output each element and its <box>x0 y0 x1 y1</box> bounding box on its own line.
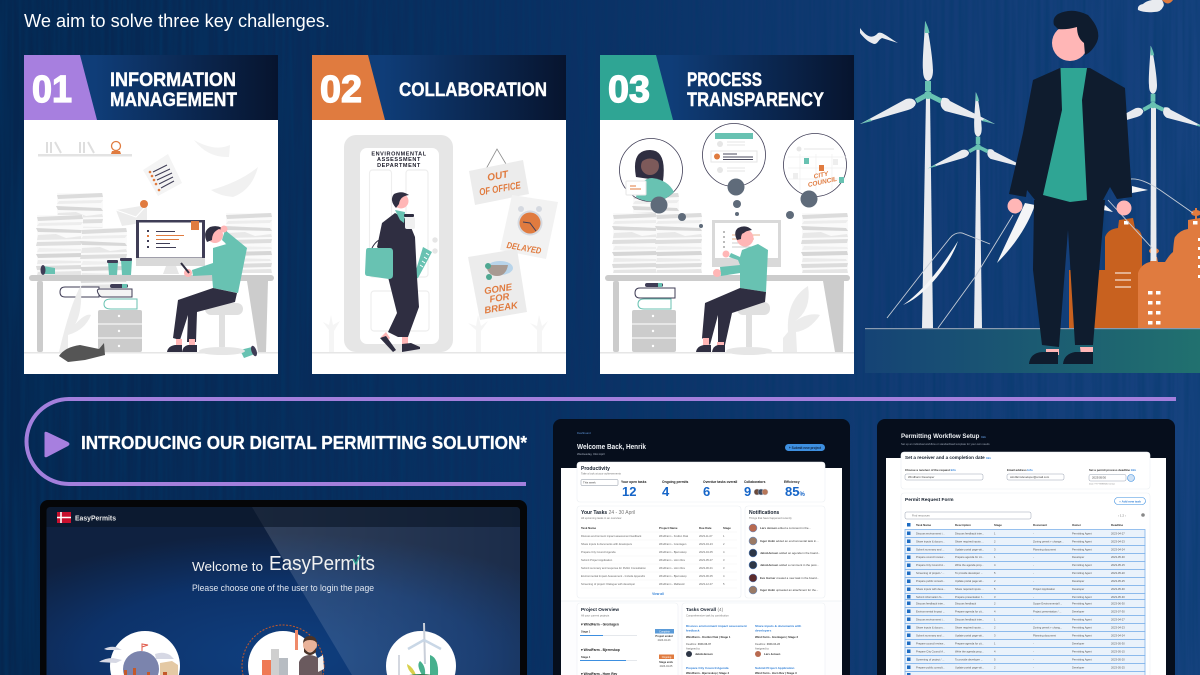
card: permit request form: Find resources <box>912 514 930 518</box>
sign: out of office: OUT <box>487 169 510 184</box>
card: notifications: Lars Jensen edited a comment in the... <box>760 526 811 530</box>
card: notifications: JakobJensen added an agenda in the board... <box>760 551 820 555</box>
dashboard greeting: Dashboard <box>577 431 591 435</box>
task rows: 2 <box>994 579 996 583</box>
thought bubble: calendar <box>784 134 846 196</box>
task rows: 1 <box>994 555 996 559</box>
card: tasks overall: Submit Project Application <box>755 666 795 670</box>
task rows: Permitting Agent <box>1072 571 1092 575</box>
task rows: Screening of project / ... <box>916 571 945 575</box>
card: notifications: Eve Garner created a new task in the board... <box>760 576 819 580</box>
card: permit request form: Deadline <box>1111 523 1123 527</box>
task rows: 2023-05-20 <box>1111 658 1125 662</box>
task rows: Scope Environmental I... <box>1033 602 1063 606</box>
person with bag <box>365 192 432 352</box>
card: permit request form: Permit Request Form <box>905 497 954 503</box>
card: your tasks: Due Date <box>699 526 712 530</box>
illustration: closed department door <box>312 135 566 354</box>
task rows: 2023-05-30 <box>1111 595 1125 599</box>
task rows: 2023-05-30 <box>1111 555 1125 559</box>
card: tasks overall: Discuss environment impact assessment <box>686 624 747 628</box>
card: your tasks: WindFarm - Bjerreskop <box>659 550 687 554</box>
task rows: 2023-05-25 <box>1111 579 1125 583</box>
card: project overview: All your current projects <box>581 614 610 618</box>
brand: EasyPermits <box>75 514 116 522</box>
buildings <box>1069 208 1200 328</box>
card: your tasks: Your Tasks 24 - 30 April <box>581 510 635 516</box>
card: productivity: 4 <box>662 484 670 499</box>
card: permit request form: Document <box>1033 523 1047 527</box>
sign: delayed <box>500 195 558 259</box>
task rows: Prepare City Council A... <box>916 563 946 567</box>
door sign text <box>371 152 427 169</box>
card: productivity: Overdue tasks overall <box>703 480 737 484</box>
card: your tasks: Discuss environment impact assessment feedback <box>581 534 642 538</box>
turbine 3 <box>1099 46 1200 261</box>
dashboard greeting: Welcome Back, Henrik <box>577 444 646 451</box>
task rows: 3 <box>994 634 996 638</box>
card: tasks overall: JakobJensen <box>695 652 713 656</box>
sign: gone for break: FOR <box>489 291 510 305</box>
card: tasks overall: developers <box>755 628 772 632</box>
number 01: 01 <box>32 69 72 111</box>
card: your tasks: 2023-06-05 <box>699 574 713 578</box>
card: project overview: ▾ WindFarm - Bjerreskop <box>580 648 620 652</box>
task rows: 4 <box>994 650 996 654</box>
task rows: - <box>1033 618 1034 622</box>
task rows: - <box>1033 658 1034 662</box>
section heading: INTRODUCING OUR DIGITAL PERMITTING SOLUTION* <box>81 433 527 453</box>
task rows: Permitting Agent <box>1072 602 1092 606</box>
task rows: - <box>1033 532 1034 536</box>
card: your tasks: 2023-05-07 <box>699 558 713 562</box>
task rows: To provide developer ... <box>955 571 983 575</box>
card: permit request form: + Add new task <box>1119 500 1141 504</box>
card: project overview: Project ended <box>655 634 673 638</box>
card: receiver and date: WindFarm Developer <box>908 475 934 479</box>
sign: gone for break: BREAK <box>484 300 520 316</box>
card: your tasks: Share inputs & documents with developers <box>581 542 633 546</box>
panel: 01 information management <box>24 55 278 374</box>
task rows: Permitting Agent <box>1072 650 1092 654</box>
task rows: Developer <box>1072 587 1084 591</box>
task rows: Share required inputs ... <box>955 540 984 544</box>
task rows: Share inputs with deve... <box>916 587 946 591</box>
card: project overview: 2023-04-23 <box>658 639 671 642</box>
welcome text: EasyPermits <box>269 553 375 575</box>
card: your tasks: Submit summary and response for Public Consultation <box>581 566 646 570</box>
task rows: Zoning permit + change... <box>1033 540 1064 544</box>
card: tasks overall: Deadline: 2023-06-07 <box>686 642 712 646</box>
task rows: 2023-07-30 <box>1111 610 1125 614</box>
card: productivity: 6 <box>703 484 710 499</box>
sign: out of office: OF OFFICE <box>478 180 522 198</box>
task rows: Share required inputs ... <box>955 587 984 591</box>
card: your tasks: WindFarm - Horn Rev <box>659 566 686 570</box>
card: tasks overall: feedback <box>686 628 700 632</box>
task rows: Share inputs & docum... <box>916 540 945 544</box>
task rows: Developer <box>1072 666 1084 670</box>
fallen blades <box>887 179 1193 328</box>
card: tasks overall <box>682 603 825 675</box>
task rows: 3 <box>994 595 996 599</box>
card: project overview: Complete <box>659 630 670 634</box>
title: INFORMATION <box>110 70 236 91</box>
card: permit request form: Owner <box>1072 523 1082 527</box>
card: your tasks: 2023-04-05 <box>699 550 713 554</box>
task rows: Permitting Agent <box>1072 540 1092 544</box>
task rows: Discuss environment i... <box>916 532 945 536</box>
user card: developer <box>242 625 324 675</box>
card: productivity: 12 <box>622 484 636 499</box>
task rows: - <box>1033 596 1034 599</box>
task rows: Update portal page wit... <box>955 548 984 552</box>
sign: gone for break <box>468 249 527 320</box>
card: your tasks: Environmental Impact Assessment - Include Appendix <box>581 574 646 578</box>
section banner frame <box>26 399 1176 484</box>
task rows: - <box>1033 556 1034 559</box>
task rows: Project Application <box>1033 587 1056 591</box>
card: notifications <box>745 506 825 598</box>
task rows: Discuss feedback inter... <box>916 602 945 606</box>
card: your tasks: 3 <box>723 566 725 570</box>
card: productivity: This week <box>583 480 596 484</box>
submit button <box>785 444 825 451</box>
task rows: Prepare agenda for cit... <box>955 642 984 646</box>
thought bubble: colleague <box>620 138 682 202</box>
task rows: 2023-05-15 <box>1111 563 1125 567</box>
task rows: 5 <box>994 587 996 591</box>
task rows: Submit summary and ... <box>916 634 945 638</box>
card: project overview: Ongoing <box>662 656 672 659</box>
task rows: Planning document <box>1033 548 1056 552</box>
task rows: 5 <box>994 571 996 575</box>
card: your tasks: 4 <box>723 574 725 578</box>
task rows: 2023-04-24 <box>1111 548 1125 552</box>
task rows: 2023-04-27 <box>1111 618 1125 622</box>
card: project overview: 2023-04-05 <box>660 665 673 668</box>
task rows: - <box>1033 666 1034 670</box>
task rows: Update portal page wit... <box>955 634 984 638</box>
card: productivity: Productivity <box>581 466 610 472</box>
task rows: Prepare presentation f... <box>955 595 984 599</box>
laptop: dashboard screen <box>553 419 850 675</box>
icon: play arrow <box>44 432 70 457</box>
task rows: 2023-06-30 <box>1111 602 1125 606</box>
card: tasks overall: Wind Farm - Grenlagen | Stage 2 <box>755 635 798 639</box>
task rows: 1 <box>994 532 996 536</box>
task rows: 2 <box>994 602 996 606</box>
card: tasks overall: Wind Farm - Horn Rev | Stage 3 <box>755 671 797 675</box>
card: notifications: Notifications <box>749 510 779 516</box>
title: TRANSPARENCY <box>687 90 824 111</box>
task rows: 2023-04-23 <box>1111 626 1125 630</box>
task rows: Permitting Agent <box>1072 658 1092 662</box>
workflow title <box>901 433 990 446</box>
title <box>687 70 824 111</box>
card: your tasks: 5 <box>723 582 725 586</box>
card: project overview: Stage ends <box>659 660 673 664</box>
card: permit request form: Description <box>955 523 971 527</box>
card: project overview <box>577 603 678 675</box>
task rows: Discuss feedback inter... <box>955 618 984 622</box>
turbine 2 <box>928 92 1028 328</box>
card: your tasks: WindFarm - Grenlagen <box>659 542 687 546</box>
card: productivity: Collaborators <box>744 480 766 484</box>
card: tasks overall: Share inputs & documents with <box>755 624 801 628</box>
card: your tasks: View all <box>652 592 664 596</box>
task rows: Zoning permit + chang... <box>1033 626 1062 630</box>
task rows: Permitting Agent <box>1072 548 1092 552</box>
cloud <box>1138 0 1173 12</box>
card: tasks overall: Prepare City Council Agenda <box>686 666 729 670</box>
task rows: Prepare council review... <box>916 642 946 646</box>
task rows: Discuss feedback inter... <box>955 532 984 536</box>
task rows: Developer <box>1072 579 1084 583</box>
card: productivity: 85% <box>785 484 805 499</box>
card: your tasks: 2023-04-23 <box>699 542 713 546</box>
card: receiver and date: windfarmdeveloper@email.com <box>1010 475 1050 479</box>
task rows: Permitting Agent <box>1072 634 1092 638</box>
door sign text: DEPARTMENT <box>377 163 421 169</box>
workflow title: Permitting Workflow Setup Info <box>901 433 986 440</box>
task rows: Permitting Agent <box>1072 618 1092 622</box>
title: PROCESS <box>687 70 762 91</box>
task rows: 2 <box>994 540 996 544</box>
task rows: 2 <box>994 626 996 630</box>
submit button: + Submit new project <box>789 446 822 450</box>
illustration: thought bubbles at desk <box>600 124 854 355</box>
card: tasks overall: Comprehensive task by contribution <box>686 614 729 618</box>
card: your tasks: All upcoming tasks in an overview <box>581 516 621 520</box>
task rows: 4 <box>994 563 996 567</box>
dashboard greeting <box>577 431 646 456</box>
task rows: 5 <box>994 658 996 662</box>
task rows: Prepare public consult... <box>916 579 945 583</box>
card: productivity: Take a look at your achievements <box>581 472 622 476</box>
task rows: 4 <box>994 610 996 614</box>
task rows: Submit summary and ... <box>916 548 945 552</box>
number tab 01 <box>24 55 97 120</box>
card: your tasks: 2023-12-07 <box>699 582 713 586</box>
card: tasks overall: Tasks Overall (4) <box>686 607 724 612</box>
logo flag <box>57 512 71 523</box>
task rows: 2023-05-25 <box>1111 666 1125 670</box>
bird <box>860 28 898 44</box>
task rows: Screening of project / ... <box>916 658 945 662</box>
card: your tasks: WindFarm - Horn Rev <box>659 558 686 562</box>
task rows: 1 <box>994 618 996 622</box>
card: tasks overall: Assigned to: <box>686 646 701 650</box>
card: permit request form: ‹ 1 2 › <box>1118 514 1126 518</box>
card: permit request form: Task Name <box>916 523 931 527</box>
title <box>110 70 237 111</box>
task rows: Developer <box>1072 610 1084 614</box>
user card: globe <box>99 631 180 675</box>
thought bubble: task list <box>702 124 766 186</box>
task rows: Write the agenda prop... <box>955 650 984 654</box>
card: your tasks: 2023-06-01 <box>699 566 713 570</box>
turbine 1 <box>860 21 995 328</box>
task rows: Update portal page wit... <box>955 666 984 670</box>
task rows: Prepare council review... <box>916 555 946 559</box>
task rows: Prepare City Council A... <box>916 650 946 654</box>
task rows: Prepare agenda for cit... <box>955 555 984 559</box>
card: your tasks: 2023-11-07 <box>699 534 713 538</box>
sign: delayed: DELAYED <box>506 240 543 256</box>
card: tasks overall: Deadline: 2023-04-23 <box>755 642 781 646</box>
task rows: Planning document <box>1033 634 1056 638</box>
laptop: login screen <box>40 500 527 675</box>
task rows: Submit information fo... <box>916 595 944 599</box>
workflow title: Set up an individual workflow or standardised template for your own needs <box>901 442 990 446</box>
card: your tasks: 1 <box>723 534 725 538</box>
task rows: 2023-04-24 <box>1111 634 1125 638</box>
task rows: - <box>1033 650 1034 654</box>
panel: 03 process transparency <box>600 55 854 374</box>
card: your tasks: 3 <box>723 558 725 562</box>
task rows: 1 <box>994 642 996 646</box>
task rows: Environmental Impact ... <box>916 610 945 614</box>
card: productivity: Ongoing permits <box>662 480 689 484</box>
title: MANAGEMENT <box>110 90 237 111</box>
sign: gone for break: GONE <box>483 282 513 297</box>
card: receiver and date: 2023/05/30 <box>1092 476 1106 480</box>
task rows: Share inputs & docum... <box>916 626 945 630</box>
task rows: Share required inputs ... <box>955 626 984 630</box>
card: receiver and date: Choose a receiver of the request Info <box>905 468 956 472</box>
card: notifications: Inger Holm added an environmental task in... <box>760 539 819 543</box>
card: productivity <box>577 462 825 502</box>
card: productivity: Efficiency <box>784 480 800 484</box>
task rows: - <box>1033 564 1034 567</box>
task rows: 2 <box>994 666 996 670</box>
card: your tasks: Project Name <box>659 526 678 530</box>
task rows: Developer <box>1072 642 1084 646</box>
card: receiver and date <box>901 452 1150 489</box>
sign: out of office <box>469 149 529 205</box>
task rows: Permitting Agent <box>1072 532 1092 536</box>
thought bubble: calendar: CITY <box>813 170 830 181</box>
task rows: Update portal page wit... <box>955 579 984 583</box>
task rows: 2023-05-15 <box>1111 650 1125 654</box>
card: receiver and date: Date YYYY/MM/DD format <box>1089 482 1115 486</box>
card: your tasks <box>577 506 741 598</box>
laptop: workflow setup screen <box>877 419 1175 675</box>
door sign text: ASSESSMENT <box>377 157 421 163</box>
task rows: 2023-05-20 <box>1111 571 1125 575</box>
card: permit request form <box>901 493 1150 675</box>
dashboard greeting: Wednesday, 01st April <box>577 452 605 456</box>
number tab 02 <box>312 55 385 120</box>
card: your tasks: Submit Project Application <box>581 558 613 562</box>
task rows: 2023-04-27 <box>1111 532 1125 536</box>
ground <box>865 329 1200 373</box>
card: your tasks: 4 <box>723 550 725 554</box>
card: receiver and date: Set a permit process deadline Info <box>1089 468 1136 472</box>
card: project overview: ▾ WindFarm - Grenlagen <box>580 622 619 626</box>
illustration: overloaded desk <box>24 140 278 362</box>
task rows: - <box>1033 580 1034 583</box>
task rows: Discuss feedback <box>955 602 977 606</box>
card: project overview: Project Overview <box>581 607 619 612</box>
number 03: 03 <box>608 69 650 111</box>
card: your tasks: WindFarm - Bjerreskop <box>659 574 687 578</box>
task rows: Prepare agenda for cit... <box>955 610 984 614</box>
welcome text: Welcome to <box>192 559 263 574</box>
number tab 03 <box>600 55 673 120</box>
card: receiver and date: Set a receiver and a completion date Info <box>905 455 991 460</box>
card: receiver and date: Email address Info <box>1007 468 1033 472</box>
task rows: Developer <box>1072 555 1084 559</box>
card: your tasks: Task Name <box>581 526 596 530</box>
task rows: Permitting Agent <box>1072 626 1092 630</box>
card: productivity: 9 <box>744 484 751 499</box>
card: notifications: Inger Holm uploaded an attachment for the... <box>760 588 819 592</box>
card: tasks overall: Assigned to: <box>755 646 770 650</box>
illustration: wind farm with standing person <box>860 0 1200 373</box>
task rows: Permitting Agent <box>1072 595 1092 599</box>
card: tasks overall: WindFarm - Bjerreskop | Stage 4 <box>686 671 729 675</box>
task rows: To provide developer ... <box>955 658 983 662</box>
number 02: 02 <box>320 69 362 111</box>
task rows: Prepare public consult... <box>916 666 945 670</box>
door sign text: ENVIRONMENTAL <box>371 152 427 158</box>
task rows: 3 <box>994 548 996 552</box>
heading: three key challenges: We aim to solve three key challenges. <box>24 11 330 31</box>
card: your tasks: Screening of project: Dialogue with developer <box>581 582 635 586</box>
standing person <box>1008 11 1132 364</box>
welcome text <box>192 553 375 594</box>
card: project overview: Stage 4 <box>581 655 591 659</box>
welcome text: Please choose one of the user to login the page <box>192 583 374 594</box>
task rows <box>905 530 1145 675</box>
card: your tasks: WindFarm - Kreifen Flak <box>659 534 689 538</box>
card: your tasks: Prepare City Council Agenda <box>581 550 616 554</box>
card: notifications: Things that have happened recently <box>749 516 792 520</box>
task rows: Permitting Agent <box>1072 563 1092 567</box>
task rows: - <box>1033 642 1034 646</box>
card: your tasks: WindFarm - Møllerød <box>659 582 685 586</box>
thought bubble: calendar: COUNCIL <box>807 176 838 189</box>
card: your tasks: Stage <box>723 526 731 530</box>
task rows: 2023-04-23 <box>1111 540 1125 544</box>
task rows: 2023-05-30 <box>1111 587 1125 591</box>
panel: 02 collaboration <box>312 55 566 374</box>
task rows: Discuss environment i... <box>916 618 945 622</box>
task rows: 2023-05-30 <box>1111 642 1125 646</box>
card: tasks overall: WindFarm - Kreifen Flak | Stage 1 <box>686 635 731 639</box>
card: tasks overall: Lars Jensen <box>764 652 781 656</box>
task rows: Project presentation / ... <box>1033 610 1062 614</box>
card: project overview: Stage 1 <box>581 630 591 634</box>
card: notifications: JakobJensen added a comment in the post... <box>760 563 819 567</box>
card: your tasks: 2 <box>723 542 725 546</box>
title: COLLABORATION <box>399 80 547 101</box>
task rows: Write the agenda prop... <box>955 563 984 567</box>
task rows: - <box>1033 572 1034 575</box>
card: productivity: Your open tasks <box>621 480 647 484</box>
card: permit request form: Stage <box>994 523 1002 527</box>
user card: wind energy <box>386 623 456 675</box>
